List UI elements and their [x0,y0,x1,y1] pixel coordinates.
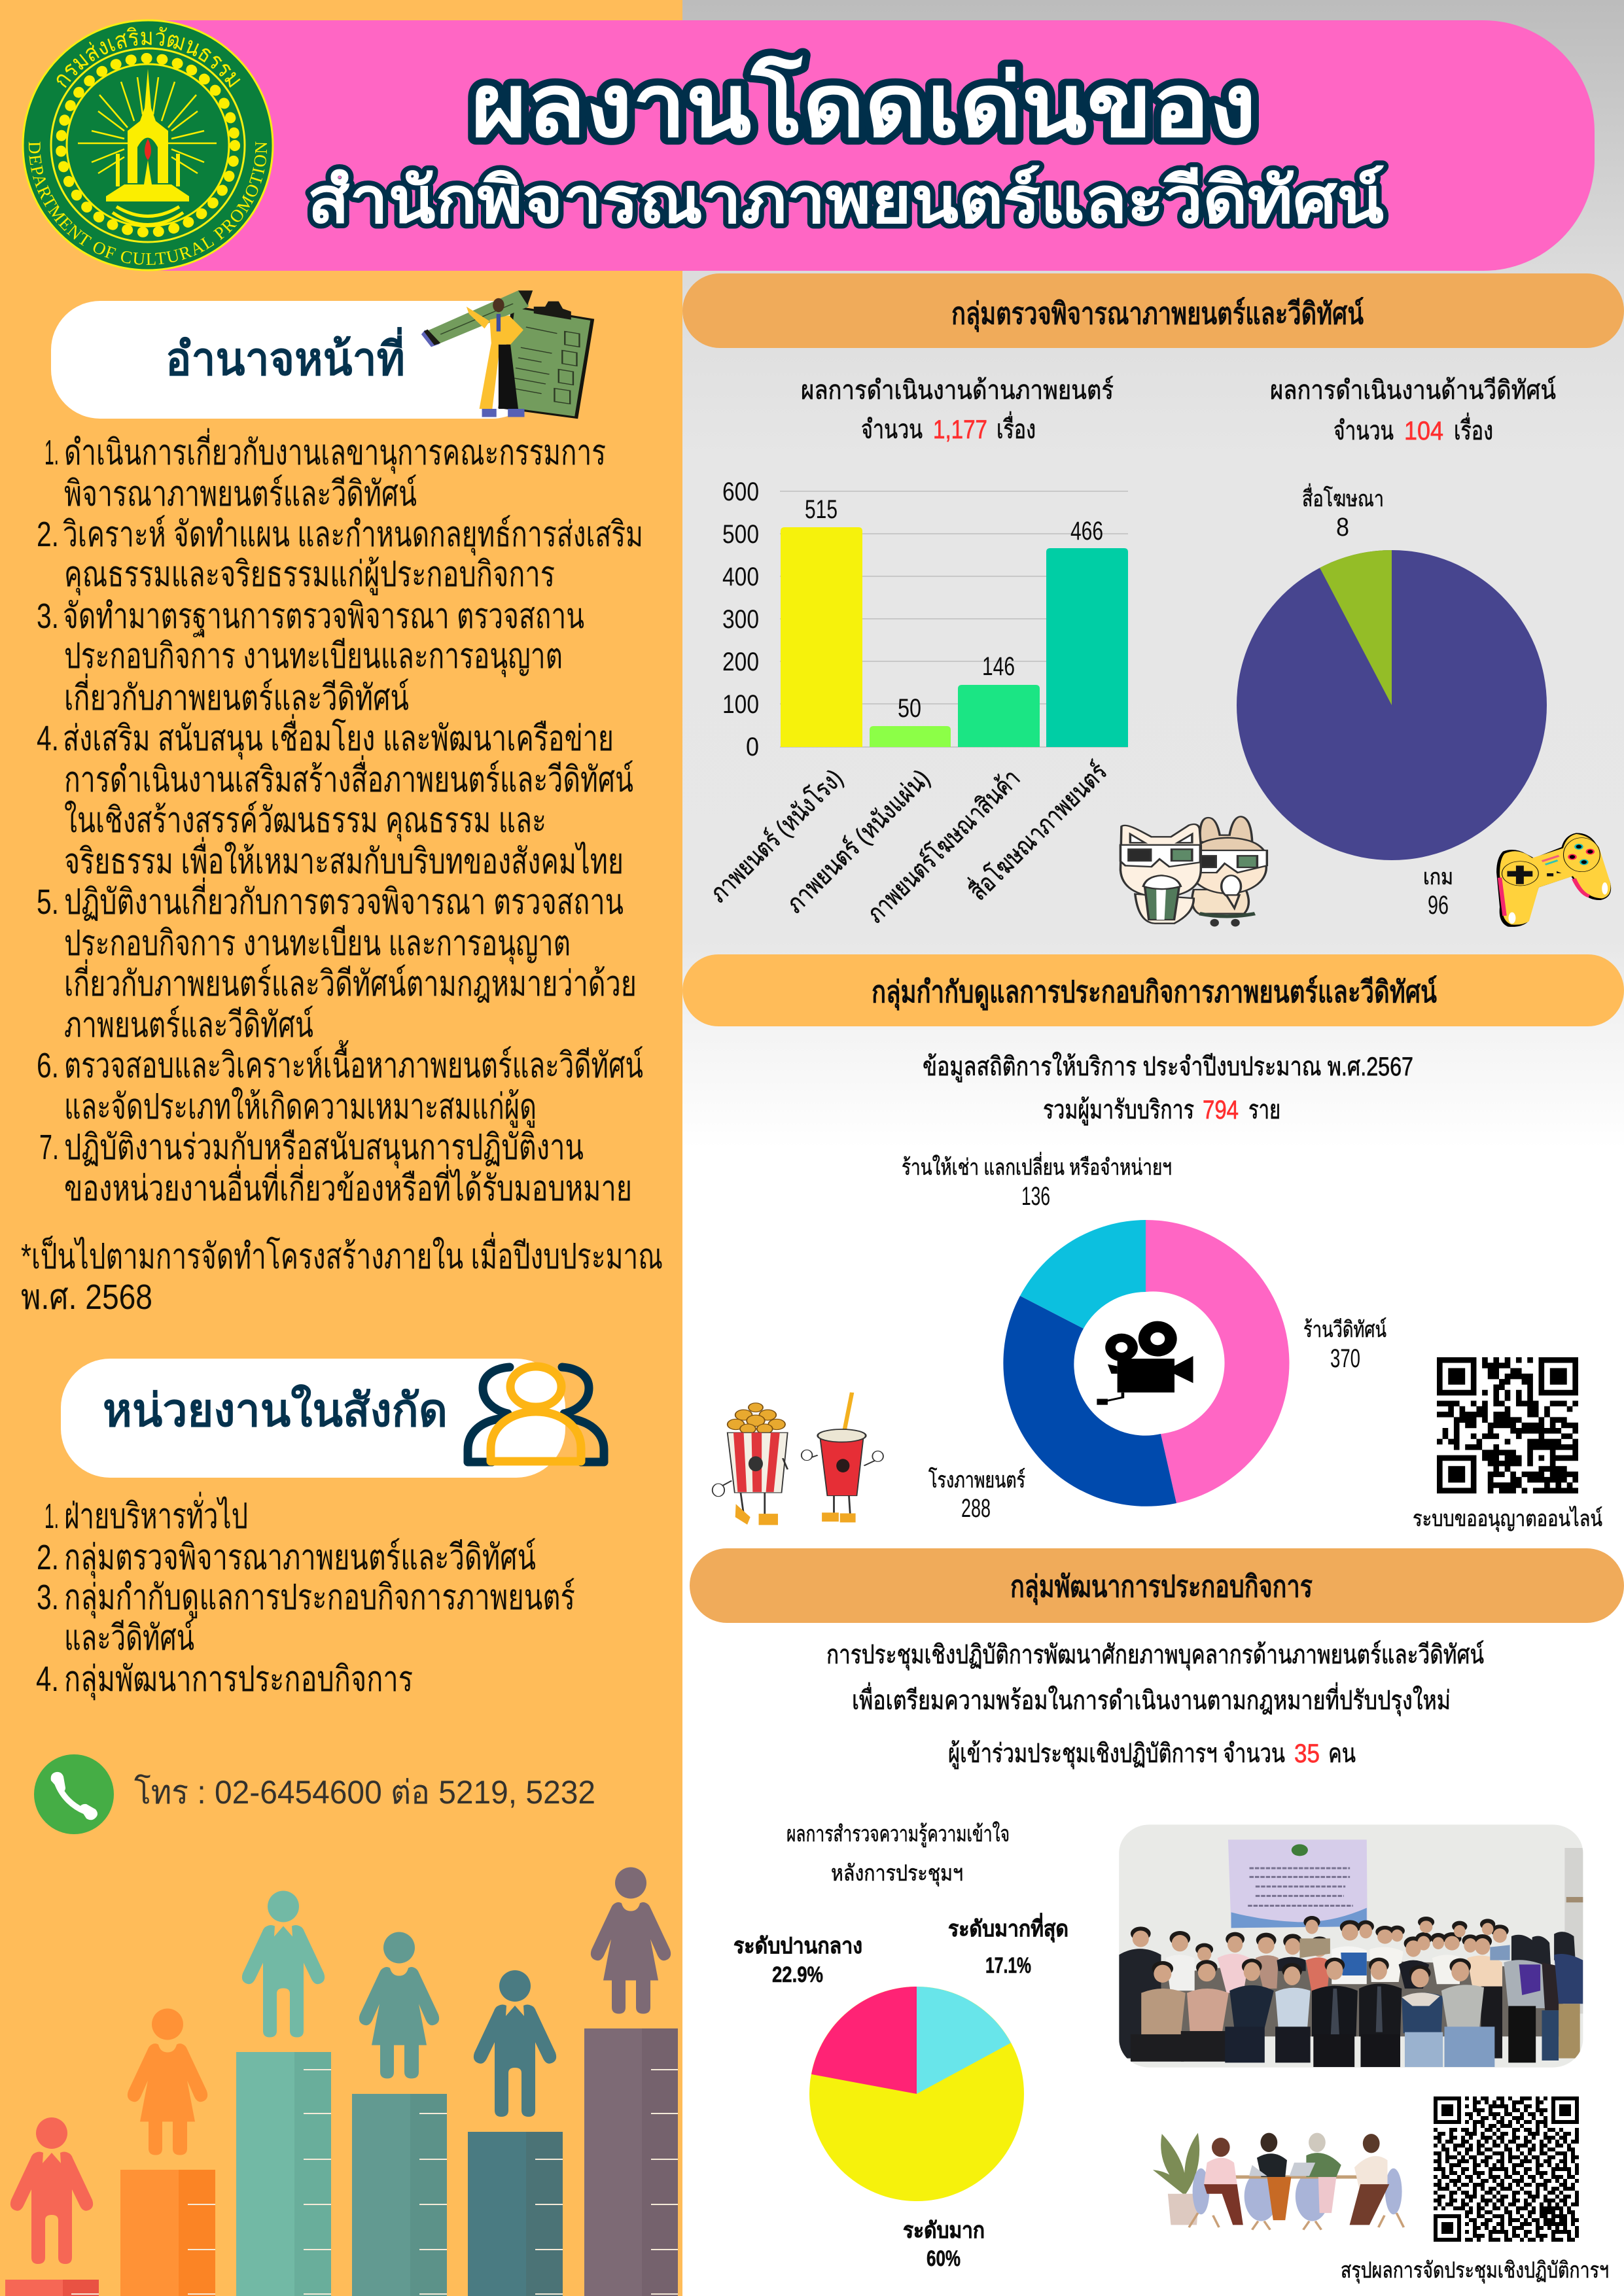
panel: film review group [682,273,1624,928]
text block: duties list: ส่งเสริม สนับสนุน เชื่อมโยง และพัฒนาเครือข่าย [63,714,614,760]
text: phone number: โทร : 02-6454600 ต่อ 5219, 5232 [134,1774,595,1811]
section heading: กลุ่มกำกับดูแลการประกอบกิจการภาพยนตร์และวีดิทัศน์ [872,975,1437,1011]
text block: duties list: ดำเนินการเกี่ยวกับงานเลขานุการคณะกรรมการ [64,428,606,474]
column 3 with figure [236,1890,331,2296]
text block: duties list: ประกอบกิจการ งานทะเบียนและการอนุญาต [64,636,563,678]
column 6 with figure [584,1867,678,2296]
bar value labels: 515 [805,495,838,524]
pie chart: video: 8 [1336,513,1349,542]
text block: duties list [37,428,643,1208]
illustration: people on rising columns [5,1867,678,2296]
y axis labels: 400 [722,563,759,591]
text block: duties list: ตรวจสอบและวิเคราะห์เนื้อหาภาพยนตร์และวิดีทัศน์ [64,1040,643,1085]
donut chart: 288 [961,1494,991,1523]
text block: duties list: ประกอบกิจการ งานทะเบียน และการอนุญาต [64,924,571,965]
pie chart: video: เกม [1423,865,1453,890]
y axis labels: 0 [746,733,759,761]
unit 2: 2. [37,1538,59,1577]
y axis labels: 100 [722,690,759,719]
back row faces [1132,1919,1507,1961]
donut labels: ร้านให้เช่า แลกเปลี่ยน หรือจำหน่ายฯ [902,1152,1172,1180]
text block: duties list: เกี่ยวกับภาพยนตร์และวิดีทัศน์ตามกฎหมายว่าด้วย [64,959,637,1003]
front row hair [1152,1957,1471,1977]
text block: units list: และวีดิทัศน์ [64,1618,194,1658]
y axis labels [722,478,759,761]
icon: cats with 3D glasses [1120,816,1267,926]
text block: duties list: 1. [44,433,59,472]
pie chart: survey [733,1913,1068,2271]
film total: เรื่อง [997,411,1036,444]
video total: เรื่อง [1454,413,1493,445]
bar value labels [805,495,1103,723]
bar chart [704,478,1128,928]
heading: units: หน่วยงานในสังกัด [103,1383,448,1436]
text block: duties list: จริยธรรม เพื่อให้เหมาะสมกับบริบทของสังคมไทย [64,837,624,881]
participant count: ผู้เข้าร่วมประชุมเชิงปฏิบัติการฯ จำนวน [948,1739,1285,1769]
text block: duties list: พิจารณาภาพยนตร์และวีดิทัศน์ [64,474,417,513]
pie chart: video: 96 [1428,891,1449,920]
text block: duties list: และจัดประเภทให้เกิดความเหมาะสมแก่ผู้ดู [64,1087,537,1128]
panel: left orange background [0,0,682,2296]
QR code: online licence system [1437,1360,1578,1491]
donut chart: 136 [1021,1182,1050,1211]
icon: department logo seal [22,20,274,271]
text block: duties list: ในเชิงสร้างสรรค์วัฒนธรรม คุณธรรม และ [64,800,546,842]
back row shirts [1169,1970,1195,1991]
pie chart: survey: 22.9% [772,1962,823,1987]
section heading: กลุ่มพัฒนาการประกอบกิจการ [1010,1569,1313,1605]
panel: duties heading pill [51,301,541,419]
text block: duties list: เกี่ยวกับภาพยนตร์และวีดิทัศน์ [64,673,409,718]
illustration: people at a meeting table [1153,2133,1403,2230]
survey title [786,1821,1010,1887]
film chart title: ผลการดำเนินงานด้านภาพยนตร์ [801,375,1114,405]
donut chart: 370 [1330,1344,1360,1373]
participant count: 35 [1294,1739,1320,1768]
item 7: 7. [39,1128,59,1167]
video chart title: ผลการดำเนินงานด้านวีดิทัศน์ [1270,375,1556,405]
column 5 with figure [468,1970,563,2296]
donut chart [902,1152,1386,1523]
statistics line: ข้อมูลสถิติการให้บริการ ประจำปีงบประมาณ พ.ศ.2567 [923,1051,1413,1082]
text block: duties list: ปฏิบัติงานเกี่ยวกับการตรวจพิจารณา ตรวจสถาน [64,877,624,922]
icon: person with pencil and clipboard [421,290,592,417]
bar category labels [704,755,1112,928]
panel: units heading pill [61,1359,565,1478]
unit 4: 4. [36,1660,59,1699]
icon: game controller [1496,833,1611,927]
photo: workshop group picture [1112,1818,1590,2074]
text block: footnote [21,1232,663,1317]
text block: units list [36,1491,575,1701]
text block: duties list: จัดทำมาตรฐานการตรวจพิจารณา ตรวจสถาน [63,597,584,637]
item 4: 4. [37,719,59,758]
participant count: คน [1328,1739,1356,1768]
donut chart: ร้านวีดิทัศน์ [1303,1317,1386,1342]
text block: units list: ฝ่ายบริหารทั่วไป [64,1491,248,1536]
text block: duties list: การดำเนินงานเสริมสร้างสื่อภาพยนตร์และวีดิทัศน์ [64,755,633,799]
logo Thai arc text: กรมส่งเสริมวัฒนธรรม [56,27,241,88]
icon: group of people [468,1366,604,1462]
pie chart: survey: ระดับปานกลาง [733,1934,862,1958]
QR code: workshop summary [1434,2096,1579,2242]
item 6: 6. [37,1046,59,1085]
icon: popcorn mascot [713,1403,788,1525]
text block: units list: 1. [44,1497,59,1536]
film total [861,411,1036,444]
video total [1333,413,1493,445]
y axis labels: 200 [722,648,759,676]
pie chart: survey: 17.1% [985,1953,1031,1978]
text block: duties list: ของหน่วยงานอื่นที่เกี่ยวข้องหรือที่ได้รับมอบหมาย [64,1164,632,1208]
bars [781,527,862,747]
item 2: 2. [37,515,59,554]
icon: movie camera [1097,1321,1193,1405]
y axis labels: 300 [722,605,759,634]
panel: pink title band [148,20,1595,271]
total served: รวมผู้มารับบริการ [1043,1096,1194,1125]
pie labels: สื่อโฆษณา [1302,483,1384,512]
panel: business development group [690,1548,1624,2284]
bar category labels: ภาพยนตร์ (หนังโรง) [704,763,848,908]
crowd mid fill [1161,1961,1563,2036]
pie chart: video [1237,483,1547,920]
item 5: 5. [37,882,59,922]
bar value labels: 466 [1070,517,1103,546]
bar category labels: ภาพยนตร์โฆษณาสินค้า [861,763,1025,928]
heading: duties: อำนาจหน้าที่ [166,326,405,385]
item 3: 3. [37,597,59,636]
column 1 with figure [5,2117,99,2296]
text block: footnote: *เป็นไปตามการจัดทำโครงสร้างภายใน เมื่อปีงบประมาณ [21,1232,663,1276]
text block: units list: กลุ่มพัฒนาการประกอบกิจการ [64,1660,413,1701]
survey labels: ระดับมากที่สุด [948,1913,1068,1943]
workshop description line 2: เพื่อเตรียมความพร้อมในการดำเนินงานตามกฎหมายที่ปรับปรุงใหม่ [852,1682,1451,1716]
text block: duties list: ปฏิบัติงานร่วมกับหรือสนับสนุนการปฏิบัติงาน [64,1128,584,1169]
logo English arc text: DEPARTMENT OF CULTURAL PROMOTION [29,141,267,265]
section header pill [690,1548,1624,1623]
back row hair [1131,1916,1509,1955]
bar category labels: สื่อโฆษณาภาพยนตร์ [962,755,1112,906]
column 2 with figure [120,2008,215,2296]
bar value labels: 50 [898,694,921,723]
y axis labels: 600 [722,478,759,506]
donut chart: โรงภาพยนตร์ [928,1467,1025,1493]
text block: duties list: คุณธรรมและจริยธรรมแก่ผู้ประกอบกิจการ [64,555,555,596]
text block: duties list: ภาพยนตร์และวีดิทัศน์ [64,1005,313,1045]
pie chart: survey: 60% [927,2246,961,2271]
total served: ราย [1248,1096,1280,1124]
text block: duties list: วิเคราะห์ จัดทำแผน และกำหนดกลยุทธ์การส่งเสริม [63,515,643,556]
video total: จำนวน [1333,417,1394,445]
title line 2: สำนักพิจารณาภาพยนตร์และวีดิทัศน์ [308,164,1384,236]
unit 3: 3. [37,1578,59,1617]
text block: units list: กลุ่มกำกับดูแลการประกอบกิจการภาพยนตร์ [64,1578,575,1619]
column 4 with figure [352,1932,447,2296]
bar value labels: 146 [982,652,1015,681]
panel: right grey-to-white background [682,0,1624,2296]
section header pill [682,954,1624,1026]
film total: จำนวน [861,415,923,444]
y axis labels: 500 [722,520,759,549]
header banner [148,20,1595,271]
pie chart: survey: ระดับมาก [903,2218,985,2243]
video total: 104 [1404,417,1443,445]
film total: 1,177 [933,415,987,444]
bar category labels: ภาพยนตร์ (หนังแผ่น) [781,764,935,918]
icon: phone [34,1754,114,1834]
title line 1: ผลงานโดดเด่นของ [471,55,1256,155]
text block: units list: กลุ่มตรวจพิจารณาภาพยนตร์และวีดิทัศน์ [64,1538,536,1579]
section heading: กลุ่มตรวจพิจารณาภาพยนตร์และวีดิทัศน์ [951,296,1364,332]
text block: footnote: พ.ศ. 2568 [21,1278,152,1317]
survey title: หลังการประชุมฯ [831,1861,963,1887]
panel: business supervision group [682,954,1624,1532]
icon: soda mascot [802,1393,883,1522]
survey title: ผลการสำรวจความรู้ความเข้าใจ [786,1821,1010,1847]
section header pill [682,273,1624,348]
front row faces [1154,1961,1469,1987]
total served: 794 [1203,1096,1239,1124]
